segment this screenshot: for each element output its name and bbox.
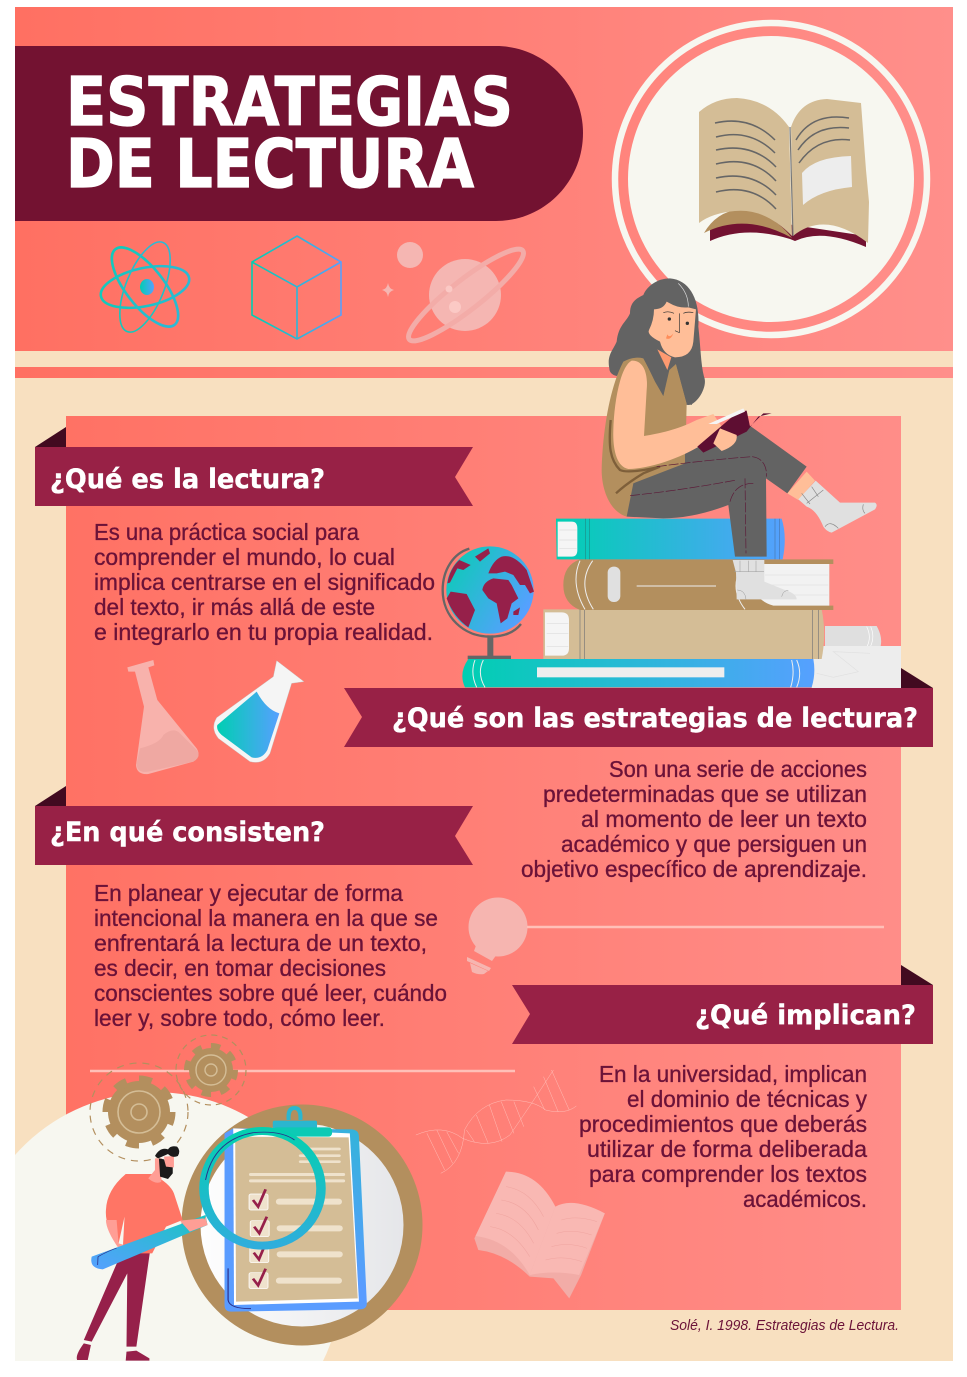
- text: what they imply: procedimientos que deberás: [579, 1111, 867, 1137]
- magnifier: [91, 1131, 321, 1269]
- large gear: [90, 1063, 188, 1161]
- text: what they consist of: [94, 880, 447, 1031]
- text: what they imply: En la universidad, implican: [599, 1061, 867, 1087]
- woman book: [697, 411, 772, 453]
- panel: main content background: [66, 416, 901, 1310]
- ribbon heading: ¿Qué es la lectura?: ¿Qué es la lectura?: [50, 464, 325, 495]
- icon: DNA strand: [416, 1070, 576, 1173]
- illustration: woman reading on books with globe: [443, 278, 901, 688]
- text: definition of reading: comprender el mundo, lo cual: [94, 544, 395, 570]
- icon: atom: [97, 235, 193, 339]
- ribbon heading: ¿Qué implican?: ¿Qué implican?: [695, 1000, 916, 1031]
- text: what strategies are: [521, 756, 867, 882]
- text: what they consist of: leer y, sobre todo, cómo leer.: [94, 1005, 385, 1031]
- illustration: checklist under magnifier: [191, 1106, 413, 1336]
- icon: open book in circle: [615, 23, 927, 335]
- man legs: [84, 1250, 150, 1347]
- icon: cube: [252, 236, 341, 339]
- text: what strategies are: objetivo específico de aprendizaje.: [521, 856, 867, 882]
- hill behind bottom illustration: [15, 1092, 342, 1361]
- citation: Solé, I. 1998. Estrategias de Lectura.: [670, 1318, 899, 1334]
- small gear: [176, 1035, 246, 1105]
- ribbon heading: ¿Qué son las estrategias de lectura?: ¿Qué son las estrategias de lectura?: [392, 703, 918, 734]
- panel: header background: [15, 7, 953, 351]
- text: definition of reading: del texto, ir más allá de este: [94, 594, 375, 620]
- woman back hair: [609, 278, 705, 405]
- text: what they consist of: conscientes sobre qué leer, cuándo: [94, 980, 447, 1006]
- man head: [148, 1146, 179, 1183]
- text: what they imply: el dominio de técnicas y: [627, 1086, 867, 1112]
- ribbon heading: ¿En qué consisten?: ¿En qué consisten?: [50, 817, 325, 848]
- ribbon heading: ¿En qué consisten?: [35, 786, 473, 865]
- ribbon heading: ¿Qué implican?: [512, 965, 933, 1044]
- text: what they imply: [579, 1061, 868, 1212]
- books stack: [462, 519, 901, 688]
- text: what they consist of: intencional la manera en la que se: [94, 905, 438, 931]
- text: what they imply: para comprender los textos: [589, 1161, 867, 1187]
- text: what strategies are: académico y que persiguen un: [561, 831, 867, 857]
- text: definition of reading: implica centrarse en el significado: [94, 569, 435, 595]
- text: definition of reading: Es una práctica social para: [94, 519, 360, 545]
- text: what strategies are: predeterminadas que se utilizan: [543, 781, 867, 807]
- title banner: [15, 46, 583, 221]
- text: what they imply: académicos.: [743, 1186, 867, 1212]
- text: definition of reading: e integrarlo en tu propia realidad.: [94, 619, 433, 645]
- woman vest: [602, 358, 687, 517]
- title: ESTRATEGIAS: [66, 63, 513, 141]
- panel: cream page background: [15, 351, 953, 1361]
- header stripe: [15, 367, 953, 378]
- text: what they consist of: En planear y ejecutar de forma: [94, 880, 404, 906]
- icon: flasks: [127, 660, 304, 774]
- woman arm: [613, 361, 722, 469]
- ribbon heading: ¿Qué es la lectura?: [35, 427, 473, 506]
- woman leg pants: [627, 423, 807, 557]
- title: [66, 63, 513, 203]
- text: what strategies are: Son una serie de acciones: [609, 756, 867, 782]
- text: what they consist of: enfrentará la lectura de un texto,: [94, 930, 427, 956]
- icon: faded open book: [474, 1172, 605, 1298]
- ribbon heading: ¿Qué son las estrategias de lectura?: [344, 668, 933, 747]
- icon: planet: [382, 239, 532, 351]
- icon: globe: [443, 546, 534, 659]
- clipboard: [225, 1106, 367, 1312]
- woman figure: [602, 278, 877, 599]
- text: what they imply: utilizar de forma deliberada: [587, 1136, 868, 1162]
- text: what strategies are: al momento de leer un texto: [581, 806, 867, 832]
- text: what they consist of: es decir, en tomar decisiones: [94, 955, 386, 981]
- title: DE LECTURA: [66, 125, 474, 203]
- man shirt: [106, 1174, 183, 1253]
- icon: light bulb: [467, 898, 528, 974]
- icon: gears: [90, 1035, 246, 1161]
- text: definition of reading: [94, 519, 435, 645]
- illustration: man with magnifying glass: [77, 1131, 321, 1361]
